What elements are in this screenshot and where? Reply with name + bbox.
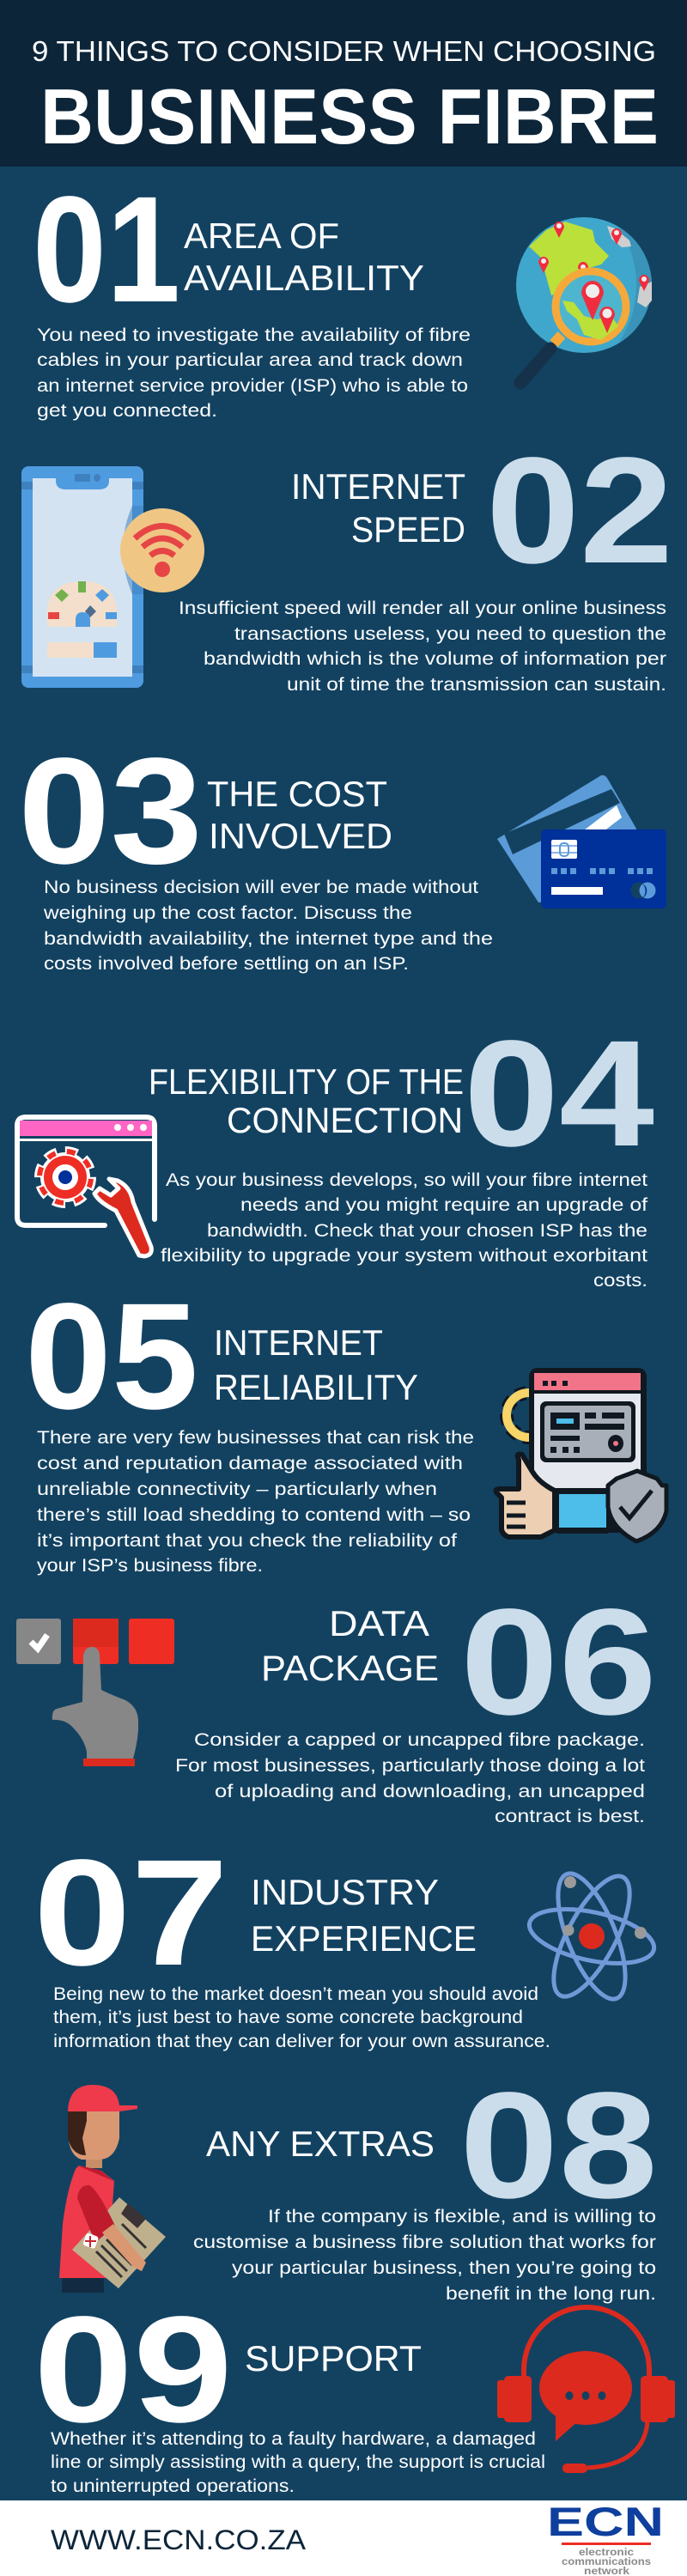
body text 04: costs.: [593, 1270, 647, 1291]
body text 05: cost and reputation damage associated with: [37, 1453, 463, 1473]
body text 01: [37, 325, 471, 421]
body text 04: [161, 1170, 647, 1291]
panel: 09 support: [33, 2286, 675, 2496]
body text 09: [51, 2428, 545, 2496]
title: business fibre: BUSINESS FIBRE: [40, 74, 659, 161]
heading: area of availability: AREA OF: [184, 216, 339, 256]
icon: browser window with gear and wrench: [17, 1117, 155, 1256]
heading: area of availability: AVAILABILITY: [184, 258, 424, 298]
number 07: 07: [33, 1829, 228, 1997]
body text 04: needs and you might require an upgrade of: [240, 1194, 647, 1215]
heading: flexibility of the connection: CONNECTION: [227, 1100, 463, 1140]
heading: data package: [261, 1603, 439, 1688]
icon: delivery person with clipboard: [59, 2085, 166, 2293]
icon: headset with chat bubble: [497, 2307, 675, 2473]
logo: ECN: communications: [562, 2555, 651, 2567]
heading: industry experience: [251, 1872, 477, 1959]
heading: flexibility of the connection: FLEXIBILITY OF THE: [149, 1061, 464, 1102]
heading: the cost involved: THE COST: [207, 774, 387, 814]
body text 01: cables in your particular area and track down: [37, 349, 463, 370]
body text 08: [193, 2206, 656, 2304]
heading: any extras: ANY EXTRAS: [206, 2123, 435, 2164]
heading: internet reliability: INTERNET: [214, 1322, 383, 1363]
body text 05: there’s still load shedding to contend with – so: [37, 1504, 471, 1525]
panel: 05 internet reliability: [25, 1273, 666, 1576]
body text 02: Insufficient speed will render all your online business: [179, 598, 666, 618]
number 08: 08: [459, 2062, 658, 2230]
number 09: 09: [33, 2286, 233, 2454]
body text 02: transactions useless, you need to question the: [234, 623, 666, 644]
body text 02: bandwidth which is the volume of information per: [204, 648, 666, 669]
heading: industry experience: INDUSTRY: [251, 1872, 439, 1912]
number 05: 05: [25, 1273, 198, 1441]
panel: 03 the cost involved: [18, 727, 666, 974]
body text 02: unit of time the transmission can sustain.: [287, 674, 666, 695]
body text 06: For most businesses, particularly those doing a lot: [175, 1755, 645, 1776]
body text 04: bandwidth. Check that your chosen ISP has the: [207, 1220, 647, 1241]
heading: data package: DATA: [329, 1603, 429, 1643]
body text 03: [43, 877, 493, 974]
body text 07: Being new to the market doesn’t mean you should avoid: [53, 1984, 538, 2004]
body text 07: information that they can deliver for your own assurance.: [53, 2031, 550, 2051]
logo: ECN: electronic: [579, 2546, 634, 2558]
number 02: 02: [486, 427, 673, 595]
number 06: 06: [460, 1578, 657, 1747]
body text 09: Whether it’s attending to a faulty hardware, a damaged: [51, 2428, 536, 2449]
website url: WWW.ECN.CO.ZA: [51, 2524, 307, 2555]
heading: industry experience: EXPERIENCE: [251, 1918, 477, 1959]
body text 01: get you connected.: [37, 400, 217, 421]
body text 05: unreliable connectivity – particularly when: [37, 1479, 437, 1499]
body text 09: line or simply assisting with a query, the support is crucial: [51, 2451, 545, 2472]
body text 03: weighing up the cost factor. Discuss the: [43, 902, 412, 923]
heading: flexibility of the connection: [149, 1061, 464, 1140]
heading: internet reliability: [214, 1322, 418, 1407]
body text 02: [179, 598, 666, 695]
header banner: [0, 0, 687, 167]
logo: ECN: ECN: [547, 2499, 664, 2544]
heading: support: SUPPORT: [245, 2338, 422, 2379]
title line: 9 things to consider: 9 THINGS TO CONSIDER WHEN CHOOSING: [32, 35, 656, 67]
icon: phone with speedometer and wifi: [21, 466, 204, 688]
heading: internet reliability: RELIABILITY: [214, 1367, 418, 1407]
body text 03: No business decision will ever be made without: [44, 877, 478, 897]
body text 06: Consider a capped or uncapped fibre package.: [194, 1729, 645, 1750]
icon: globe with magnifier: [516, 217, 652, 383]
body text 08: If the company is flexible, and is willing to: [268, 2206, 656, 2227]
body text 07: them, it’s just best to have some concrete background: [53, 2007, 523, 2027]
body text 07: [53, 1984, 550, 2051]
icon: hand holding device with shield: [496, 1368, 666, 1541]
body text 08: your particular business, then you’re going to: [232, 2257, 656, 2278]
number 01: 01: [33, 166, 180, 334]
icon: pressing selection squares: [16, 1619, 174, 1766]
body text 08: customise a business fibre solution that works for: [193, 2232, 656, 2252]
heading: internet speed: [291, 466, 465, 550]
heading: the cost involved: [207, 774, 392, 856]
body text 03: bandwidth availability, the internet type and the: [44, 928, 493, 949]
icon: credit cards: [497, 775, 666, 908]
heading: the cost involved: INVOLVED: [209, 816, 392, 856]
body text 05: it’s important that you check the reliability of: [37, 1530, 457, 1551]
body text 04: flexibility to upgrade your system without exorbitant: [161, 1245, 647, 1266]
panel: 01 area of availability: [33, 166, 652, 421]
footer: [0, 2499, 687, 2576]
heading: data package: PACKAGE: [261, 1648, 439, 1688]
panel: 04 flexibility of the connection: [17, 1010, 654, 1291]
body text 06: [175, 1729, 645, 1826]
icon: atom: [525, 1865, 659, 2008]
panel: 06 data package: [16, 1578, 657, 1826]
heading: internet speed: INTERNET: [291, 466, 465, 507]
panel: 08 any extras: [59, 2062, 658, 2304]
panel: 02 internet speed: [21, 427, 673, 695]
heading: area of availability: [184, 216, 424, 298]
body text 09: to uninterrupted operations.: [51, 2476, 295, 2496]
body text 03: costs involved before settling on an ISP.: [44, 953, 409, 974]
body text 01: an internet service provider (ISP) who is able to: [37, 375, 468, 396]
panel: 07 industry experience: [33, 1829, 659, 2051]
body text 05: [37, 1427, 474, 1576]
body text 01: You need to investigate the availability of fibre: [37, 325, 471, 345]
heading: internet speed: SPEED: [351, 509, 465, 550]
body text 05: your ISP’s business fibre.: [37, 1555, 263, 1576]
body text 05: There are very few businesses that can risk the: [37, 1427, 474, 1448]
body text 06: contract is best.: [495, 1806, 645, 1826]
number 03: 03: [18, 727, 203, 896]
body text 06: of uploading and downloading, an uncapped: [215, 1781, 645, 1801]
logo: ECN: [547, 2499, 664, 2576]
body text 08: benefit in the long run.: [446, 2283, 656, 2304]
body text 04: As your business develops, so will your fibre internet: [166, 1170, 647, 1190]
number 04: 04: [464, 1010, 654, 1178]
